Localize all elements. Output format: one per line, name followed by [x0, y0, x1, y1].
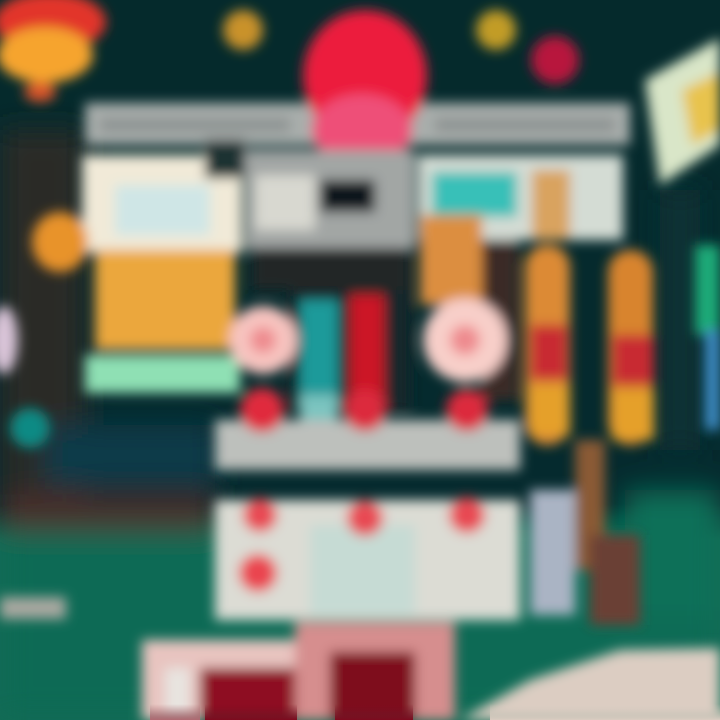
small table chip [0, 597, 66, 619]
vertical bars: orange red [525, 245, 654, 570]
orange lantern left [32, 212, 88, 272]
left edge lights [0, 306, 50, 448]
center bars: teal and red [300, 295, 384, 425]
small red balloon [531, 36, 579, 84]
gift boxes [142, 622, 455, 720]
bottom right paper [460, 648, 720, 720]
yellow lights [223, 10, 516, 50]
bottom edge fill [150, 704, 720, 720]
right side figure [530, 490, 640, 625]
pink circles [229, 298, 507, 382]
panel: left card [82, 155, 242, 393]
red circles row [240, 388, 488, 432]
panel: center block [205, 140, 415, 410]
header band [85, 103, 630, 145]
panel: right card top [418, 155, 623, 400]
lantern: top left [0, 0, 106, 102]
top right banner [645, 38, 720, 185]
right edge stripe [695, 245, 720, 430]
bottom cards [215, 497, 520, 620]
red balloon [303, 10, 427, 166]
grey results panel [215, 420, 520, 470]
